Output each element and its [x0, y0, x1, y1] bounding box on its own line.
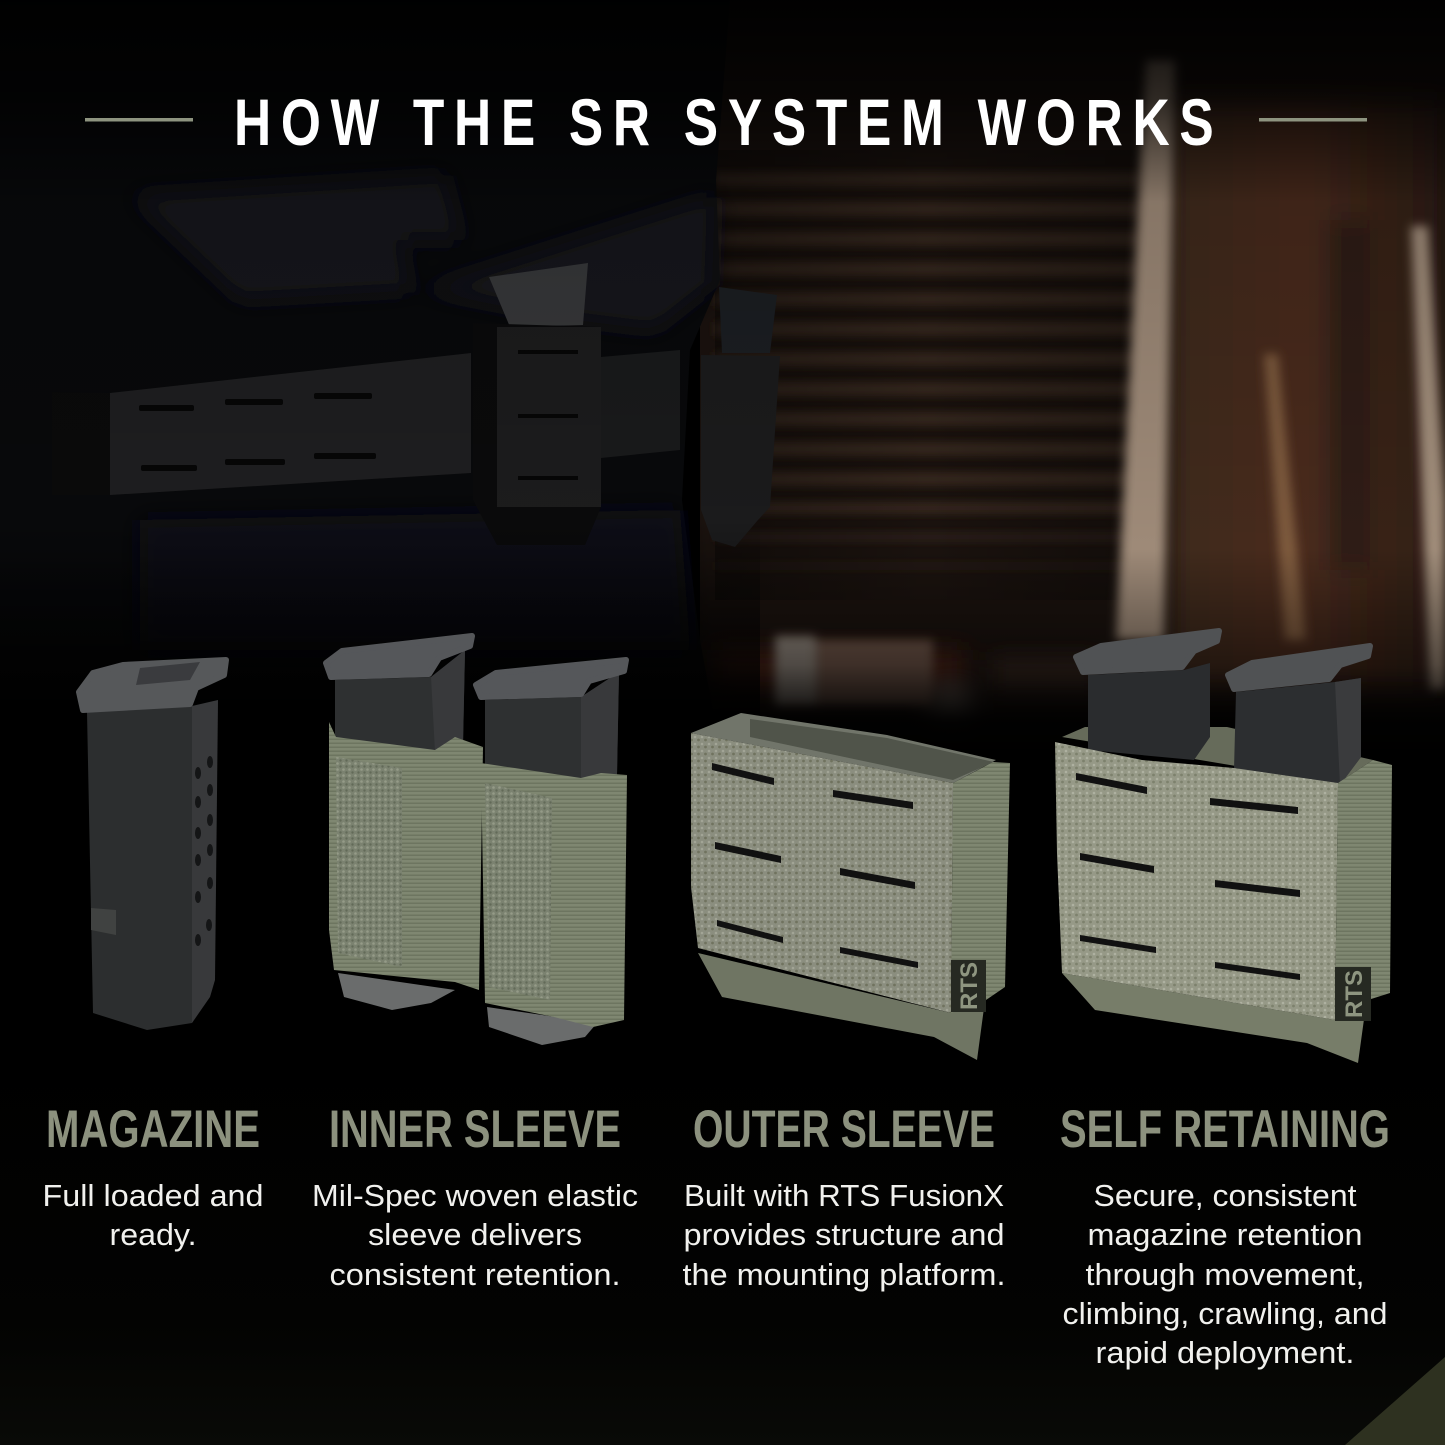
description: ready. — [110, 1217, 196, 1252]
description: Full loaded and — [42, 1178, 264, 1213]
rule: right — [1259, 118, 1367, 122]
background photo: figure with belt — [0, 0, 800, 1035]
description: through movement, — [1086, 1257, 1364, 1292]
description — [682, 1178, 1006, 1292]
description: consistent retention. — [330, 1257, 620, 1292]
description: magazine retention — [1088, 1217, 1362, 1252]
description: Secure, consistent — [1094, 1178, 1357, 1213]
product: outer sleeve — [691, 713, 1010, 1060]
title text: HOW THE SR SYSTEM WORKS — [234, 85, 1214, 159]
description: sleeve delivers — [368, 1217, 582, 1252]
column: self retaining — [1060, 1100, 1390, 1370]
column: outer sleeve — [682, 1100, 1006, 1292]
bottom texture: dark floor and green corner — [0, 1040, 1445, 1445]
description — [312, 1178, 638, 1292]
description: Mil-Spec woven elastic — [312, 1178, 638, 1213]
description: the mounting platform. — [682, 1257, 1006, 1292]
heading: MAGAZINE — [46, 1100, 260, 1159]
product: magazine — [79, 660, 226, 1030]
description: rapid deployment. — [1096, 1335, 1354, 1370]
rule: left — [85, 118, 193, 122]
RTS tag: RTS — [1341, 970, 1368, 1018]
RTS tag — [1335, 967, 1371, 1021]
description: provides structure and — [684, 1217, 1004, 1252]
description — [1062, 1178, 1388, 1370]
description — [42, 1178, 264, 1252]
column: inner sleeve — [312, 1100, 638, 1292]
description: climbing, crawling, and — [1062, 1296, 1388, 1331]
product: inner sleeve — [326, 636, 627, 1045]
heading: INNER SLEEVE — [329, 1100, 621, 1159]
column: magazine — [42, 1100, 264, 1252]
title — [85, 85, 1367, 159]
heading: OUTER SLEEVE — [693, 1100, 995, 1159]
product: self retaining — [1055, 631, 1392, 1063]
RTS tag: RTS — [956, 962, 983, 1010]
description: Built with RTS FusionX — [684, 1178, 1004, 1213]
